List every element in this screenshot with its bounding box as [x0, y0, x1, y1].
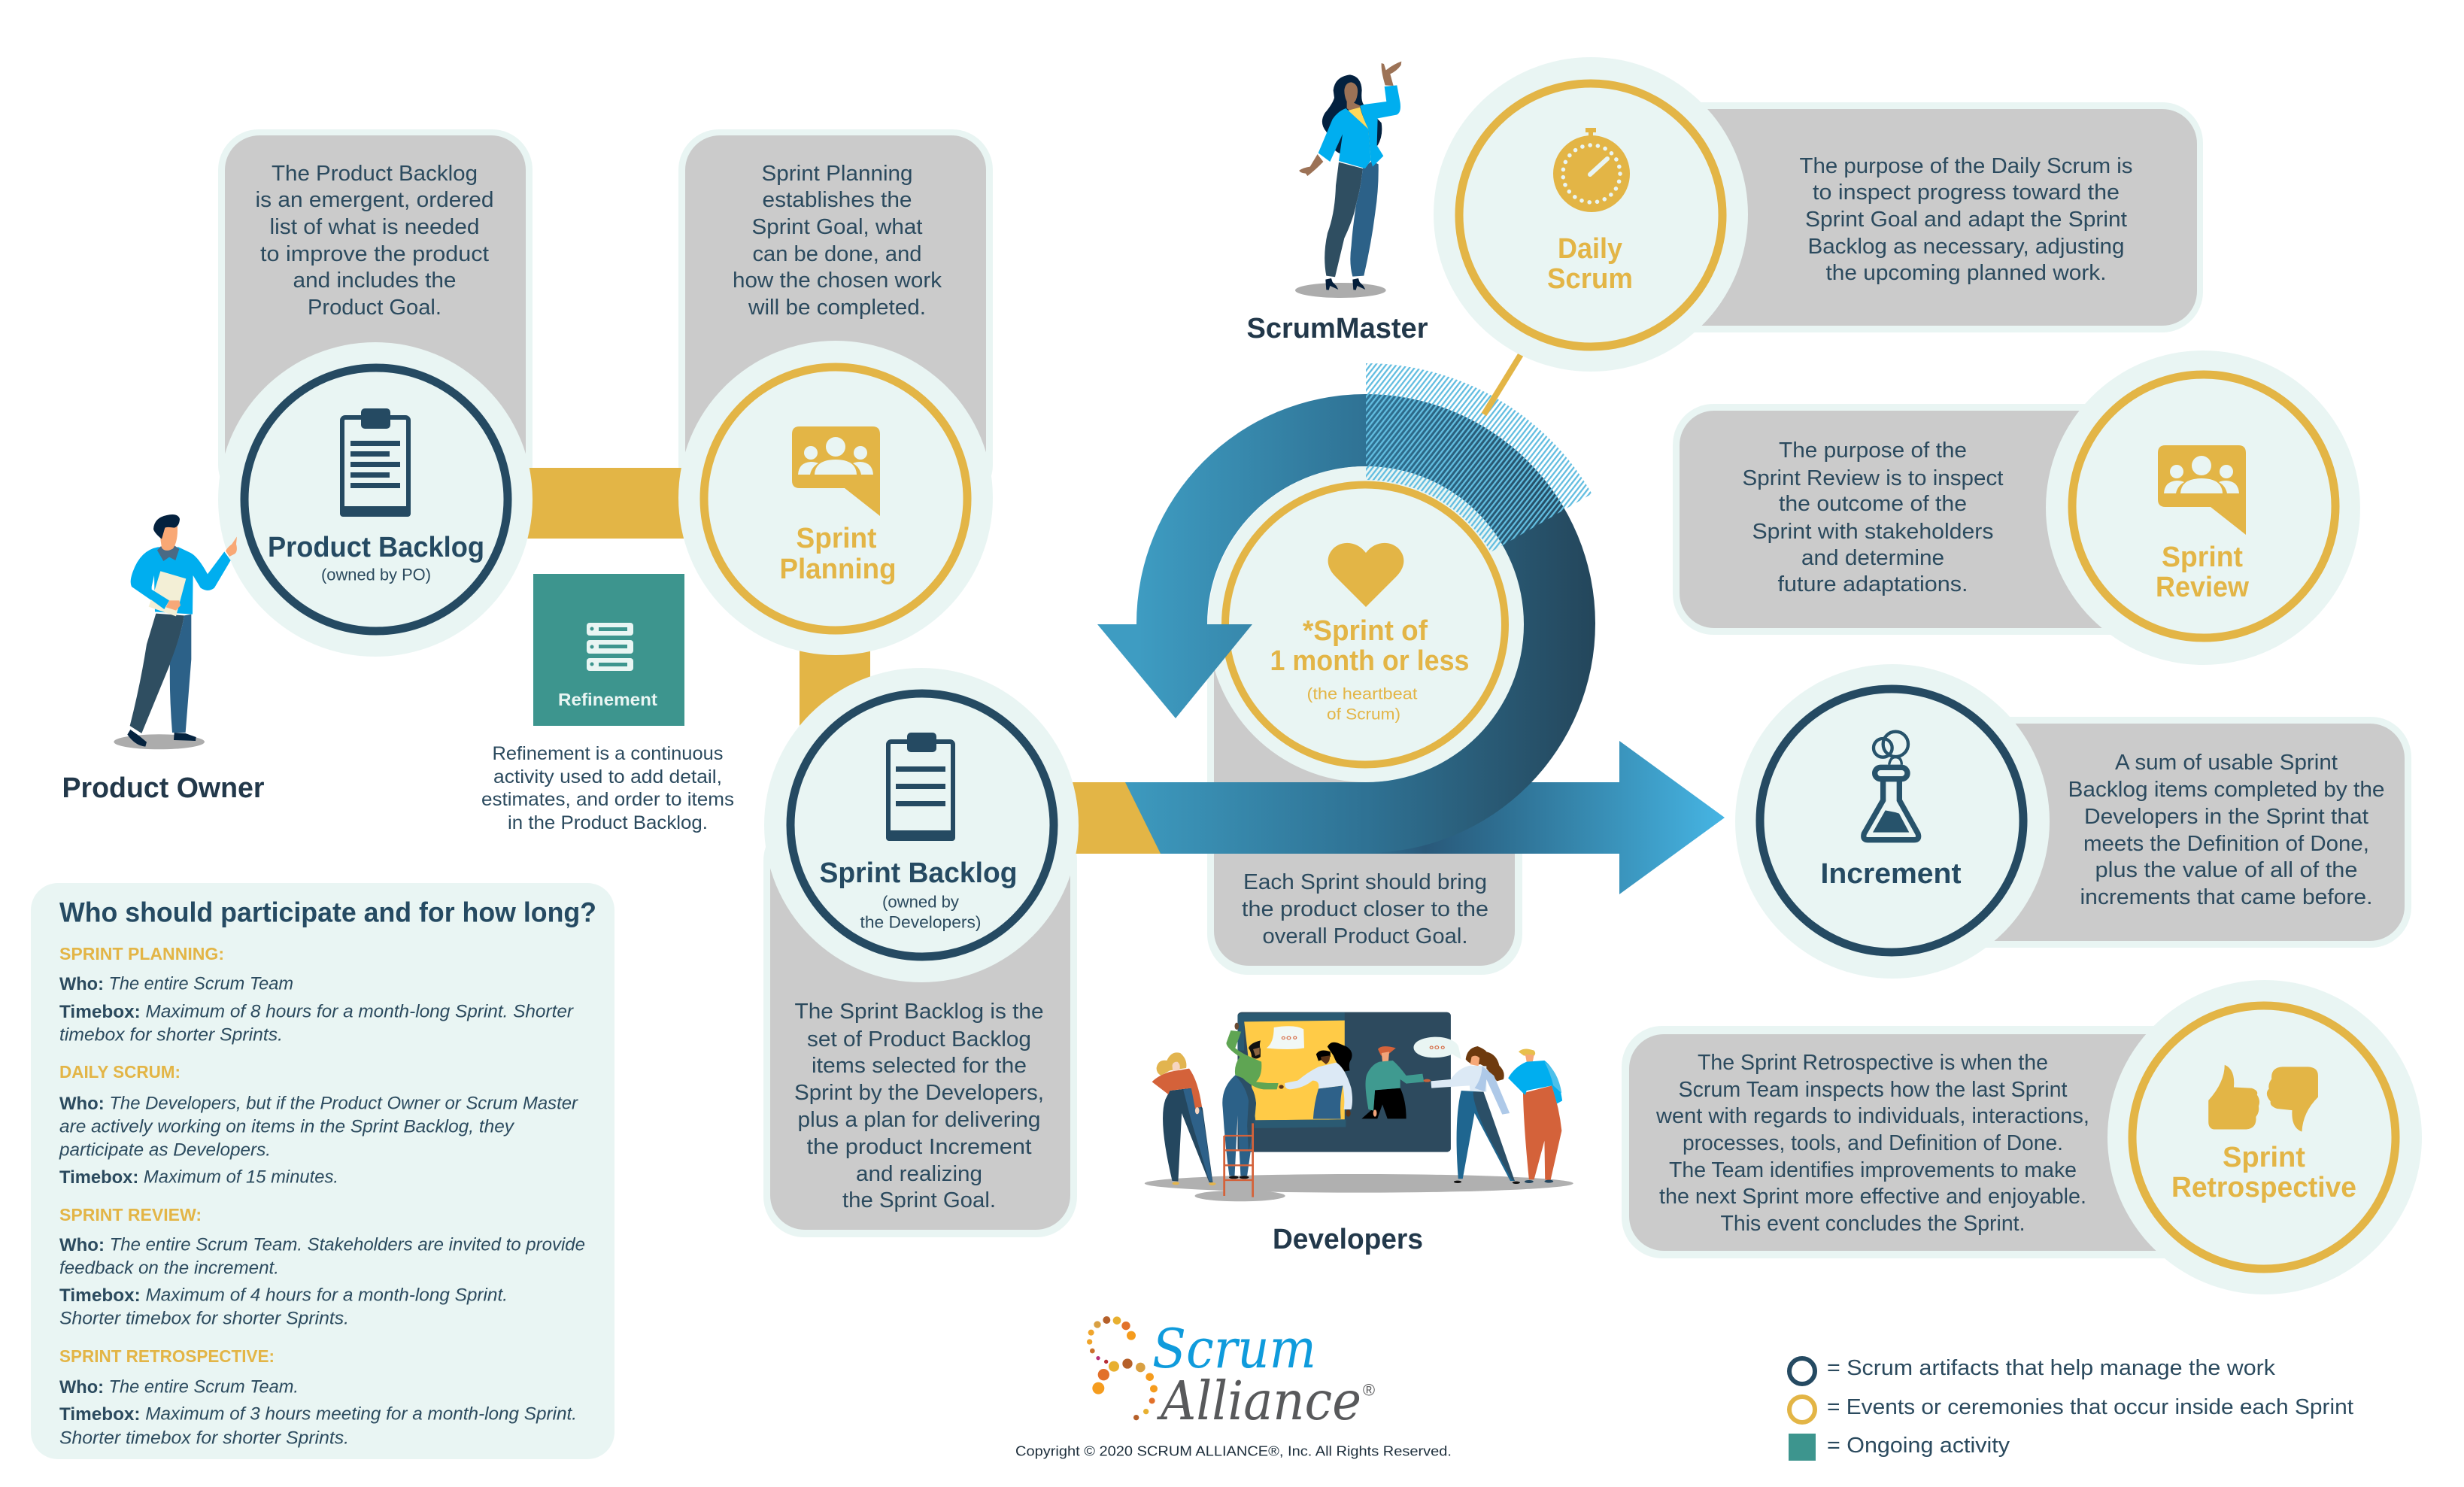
event: Product Backlog circle: (owned by PO): [321, 566, 431, 584]
panel: Sprint Review description card: The purpose of the: [1779, 439, 1967, 463]
event: Sprint Backlog circle: (owned by: [882, 892, 959, 912]
diagram: sprint loop ring: [1136, 394, 1595, 853]
event: Sprint center circle: [1225, 484, 1505, 764]
panel: Sprint Backlog description card: set of Product Backlog: [807, 1027, 1031, 1052]
panel: Who should participate and for how long: feedback on the increment.: [59, 1258, 279, 1279]
activity: Refinement square: [533, 574, 684, 726]
panel: Product Backlog description card: The Product Backlog: [272, 162, 478, 186]
panel: Daily Scrum description card: [1579, 102, 2203, 332]
event: Sprint Review circle: Sprint: [2162, 542, 2243, 573]
label: Product Owner: Product Owner: [62, 772, 265, 804]
panel: Daily Scrum description card: Backlog as necessary, adjusting: [1808, 235, 2124, 259]
legend: text: = Scrum artifacts that help manage the work: [1827, 1356, 2276, 1380]
panel: Product Backlog description card: Product Goal.: [308, 296, 442, 320]
text: copyright: Copyright © 2020 SCRUM ALLIANCE®, Inc. All Rights Reserved.: [1015, 1443, 1452, 1459]
panel: Sprint Retrospective description card: This event concludes the Sprint.: [1721, 1212, 2025, 1236]
panel: Who should participate and for how long: [31, 883, 614, 1459]
legend: ongoing activity square: [1789, 1434, 1816, 1461]
event: Sprint Backlog circle: [764, 668, 1079, 982]
woman 1: [1157, 1052, 1186, 1076]
logo: Scrum Alliance: Scrum: [1152, 1317, 1316, 1380]
panel: Sprint Planning description card: will be completed.: [748, 296, 926, 320]
panel: Sprint goal card under the sprint circle: [1207, 587, 1522, 975]
text: refinement description: estimates, and order to items: [481, 789, 734, 810]
event: Sprint Review circle: Review: [2156, 572, 2249, 603]
panel: Sprint Retrospective description card: The Sprint Retrospective is when the: [1698, 1051, 2048, 1075]
icon: heart: [1328, 543, 1403, 607]
arrow: horizontal sprint arrow to Increment: [1068, 741, 1725, 894]
event: Product Backlog circle: Product Backlog: [268, 532, 484, 563]
panel: Product Backlog description card: list of what is needed: [269, 215, 480, 239]
event: Sprint Backlog circle: Sprint Backlog: [820, 857, 1017, 889]
panel: Sprint Review description card: Sprint Review is to inspect: [1742, 466, 2004, 490]
panel: Sprint goal card under the sprint circle: Each Sprint should bring: [1243, 870, 1487, 894]
panel: Who should participate and for how long: are actively working on items in the Sprint Backlog, they: [59, 1116, 515, 1137]
event: Daily Scrum circle: Daily: [1558, 233, 1622, 265]
panel: Sprint Planning description card: Sprint Goal, what: [752, 215, 923, 239]
event: Daily Scrum circle: [1434, 57, 1748, 372]
logo: Scrum Alliance: Alliance: [1156, 1370, 1361, 1432]
panel: Who should participate and for how long: SPRINT RETROSPECTIVE:: [59, 1346, 275, 1366]
icon: clipboard: [340, 408, 411, 517]
text: refinement description: in the Product Backlog.: [508, 812, 708, 833]
panel: Increment description card: increments that came before.: [2080, 885, 2372, 909]
event: Sprint Retrospective circle: [2107, 980, 2422, 1294]
label: ScrumMaster: ScrumMaster: [1247, 313, 1428, 344]
arrow: sprint loop arrow head: [1097, 624, 1252, 718]
panel: Increment description card: [1880, 717, 2411, 948]
panel: Sprint Review description card: the outcome of the: [1779, 492, 1967, 516]
legend: event ring: [1789, 1397, 1815, 1422]
panel: Increment description card: Developers in the Sprint that: [2084, 805, 2368, 829]
icon: review speech bubble: [2158, 445, 2246, 535]
event: Sprint center circle: *Sprint of: [1303, 615, 1428, 647]
event: Sprint center circle halo: [1208, 466, 1524, 782]
panel: Who should participate and for how long: Timebox: Maximum of 4 hours for a month-long Sprint.: [59, 1285, 508, 1306]
event: Sprint center circle: (the heartbeat: [1307, 686, 1418, 703]
panel: Who should participate and for how long: Who: The Developers, but if the Product Owner or Scrum Master: [59, 1094, 578, 1113]
connector: gold bar from Product Backlog to Sprint Planning: [511, 468, 699, 539]
panel: Who should participate and for how long: Timebox: Maximum of 3 hours meeting for a month-long Sprint.: [59, 1404, 577, 1425]
label: Developers: Developers: [1273, 1224, 1423, 1255]
event: Daily Scrum circle: Scrum: [1547, 263, 1633, 295]
panel: Who should participate and for how long: Who: The entire Scrum Team. Stakeholders are invited to provide: [59, 1235, 585, 1255]
panel: Who should participate and for how long: DAILY SCRUM:: [59, 1062, 181, 1082]
panel: Increment description card: plus the value of all of the: [2095, 858, 2357, 882]
panel: Sprint Backlog description card: the product Increment: [806, 1135, 1032, 1159]
logo: Scrum Alliance: [1087, 1316, 1375, 1432]
panel: Sprint Planning description card: Sprint Planning: [761, 162, 913, 186]
legend: [1789, 1356, 2353, 1461]
panel: Who should participate and for how long: Shorter timebox for shorter Sprints.: [59, 1428, 349, 1449]
panel: Sprint Retrospective description card: went with regards to individuals, interactions,: [1655, 1104, 2089, 1128]
event: Sprint Backlog circle: the Developers): [860, 913, 981, 931]
figure: Developers team illustration: [1145, 1012, 1573, 1201]
panel: Daily Scrum description card: to inspect progress toward the: [1813, 181, 2120, 205]
icon: clipboard: [886, 733, 955, 841]
panel: Sprint Backlog description card: Sprint by the Developers,: [794, 1081, 1044, 1105]
icon: server stack: [587, 623, 633, 671]
panel: Who should participate and for how long: Who: The entire Scrum Team: [59, 973, 293, 994]
panel: Who should participate and for how long: timebox for shorter Sprints.: [59, 1024, 283, 1045]
legend: artifact ring: [1789, 1358, 1815, 1384]
panel: Daily Scrum description card: The purpose of the Daily Scrum is: [1799, 154, 2133, 178]
panel: Sprint Backlog description card: and realizing: [856, 1162, 982, 1186]
panel: Sprint goal card under the sprint circle: overall Product Goal.: [1262, 924, 1468, 948]
event: Sprint Review circle: [2046, 351, 2360, 665]
legend: text: = Events or ceremonies that occur inside each Sprint: [1827, 1395, 2353, 1419]
legend: text: = Ongoing activity: [1827, 1434, 2010, 1458]
text: refinement description: [481, 743, 734, 833]
logo: Scrum Alliance: ®: [1363, 1381, 1375, 1399]
activity: Refinement square: Refinement: [558, 690, 657, 709]
panel: Sprint Backlog description card: items selected for the: [812, 1054, 1027, 1078]
panel: Sprint Planning description card: [678, 129, 993, 505]
panel: Who should participate and for how long: participate as Developers.: [59, 1140, 271, 1160]
event: Sprint center circle: of Scrum): [1327, 706, 1400, 724]
woman center: [1328, 1042, 1352, 1072]
panel: Sprint Planning description card: establishes the: [763, 188, 912, 212]
event: Sprint center circle: 1 month or less: [1270, 645, 1470, 677]
event: Sprint Retrospective circle: Sprint: [2223, 1142, 2305, 1173]
panel: Increment description card: A sum of usable Sprint: [2115, 751, 2338, 775]
panel: Who should participate and for how long: Who should participate and for how long?: [59, 897, 596, 928]
icon: stopwatch: [1553, 128, 1630, 212]
panel: Product Backlog description card: and includes the: [293, 269, 456, 293]
artifact: Increment circle: [1735, 664, 2050, 979]
panel: Sprint Review description card: and determine: [1801, 546, 1944, 570]
panel: Sprint Retrospective description card: Scrum Team inspects how the last Sprint: [1679, 1078, 2068, 1102]
panel: Product Backlog description card: [218, 129, 533, 505]
panel: Sprint Retrospective description card: processes, tools, and Definition of Done.: [1683, 1131, 2063, 1155]
icon: meeting speech bubble: [792, 426, 880, 516]
event: Sprint Planning circle: Sprint: [796, 523, 877, 554]
panel: Daily Scrum description card: the upcoming planned work.: [1826, 261, 2106, 285]
man on ladder: [1222, 1075, 1256, 1176]
panel: Who should participate and for how long: Who: The entire Scrum Team.: [59, 1376, 299, 1397]
legend: text: [1827, 1356, 2353, 1458]
panel: Sprint Retrospective description card: The Team identifies improvements to make: [1669, 1158, 2077, 1182]
event: Sprint Planning circle: [678, 341, 993, 655]
text: refinement description: activity used to add detail,: [493, 766, 722, 788]
event: Sprint Retrospective circle: Retrospective: [2171, 1172, 2356, 1203]
right person: [1519, 1049, 1535, 1057]
icon: flask: [1864, 732, 1919, 840]
artifact: Increment circle: Increment: [1820, 858, 1962, 890]
panel: Who should participate and for how long: Timebox: Maximum of 8 hours for a month-long Sprint. Shorter: [59, 1002, 574, 1021]
panel: Who should participate and for how long: Shorter timebox for shorter Sprints.: [59, 1309, 349, 1328]
panel: Sprint Backlog description card: [763, 820, 1077, 1237]
icon: thumbs up and down: [2208, 1065, 2318, 1132]
panel: Sprint Review description card: future adaptations.: [1778, 572, 1968, 596]
panel: Sprint Review description card: Sprint with stakeholders: [1752, 520, 1993, 544]
panel: Sprint goal card under the sprint circle: the product closer to the: [1242, 897, 1488, 921]
panel: Sprint Retrospective description card: [1622, 1026, 2268, 1258]
panel: Sprint Retrospective description card: the next Sprint more effective and enjoyable.: [1659, 1185, 2086, 1209]
panel: Sprint Planning description card: how the chosen work: [733, 269, 942, 293]
panel: Who should participate and for how long: Timebox: Maximum of 15 minutes.: [59, 1167, 338, 1187]
panel: Daily Scrum description card: Sprint Goal and adapt the Sprint: [1805, 208, 2127, 232]
man teal: [1378, 1046, 1396, 1057]
event: Sprint Planning circle: Planning: [779, 554, 897, 585]
woman right: [1466, 1046, 1504, 1081]
panel: Who should participate and for how long: SPRINT REVIEW:: [59, 1205, 202, 1224]
logo dots: [1087, 1316, 1158, 1420]
panel: Who should participate and for how long: SPRINT PLANNING:: [59, 944, 224, 964]
panel: Product Backlog description card: to improve the product: [260, 242, 489, 266]
figure: ScrumMaster: [1295, 62, 1401, 298]
hatch: daily scrum portion of the sprint loop: [1366, 363, 1592, 552]
panel: Sprint Review description card: [1673, 404, 2199, 635]
text: refinement description: Refinement is a continuous: [492, 743, 724, 764]
event: Product Backlog circle: [218, 342, 533, 657]
panel: Increment description card: meets the Definition of Done,: [2083, 832, 2369, 856]
connector: gold bar from Sprint Planning to Sprint Backlog: [800, 632, 870, 767]
panel: Sprint Planning description card: can be done, and: [752, 242, 922, 266]
panel: Increment description card: Backlog items completed by the: [2068, 778, 2384, 802]
panel: Sprint Backlog description card: plus a plan for delivering: [797, 1108, 1041, 1132]
connector: line from Daily Scrum to loop: [1484, 332, 1534, 414]
panel: Product Backlog description card: is an emergent, ordered: [256, 188, 493, 212]
figure: Product Owner: [114, 514, 237, 749]
panel: Sprint Backlog description card: the Sprint Goal.: [842, 1188, 996, 1212]
panel: Sprint Backlog description card: The Sprint Backlog is the: [794, 1000, 1044, 1024]
